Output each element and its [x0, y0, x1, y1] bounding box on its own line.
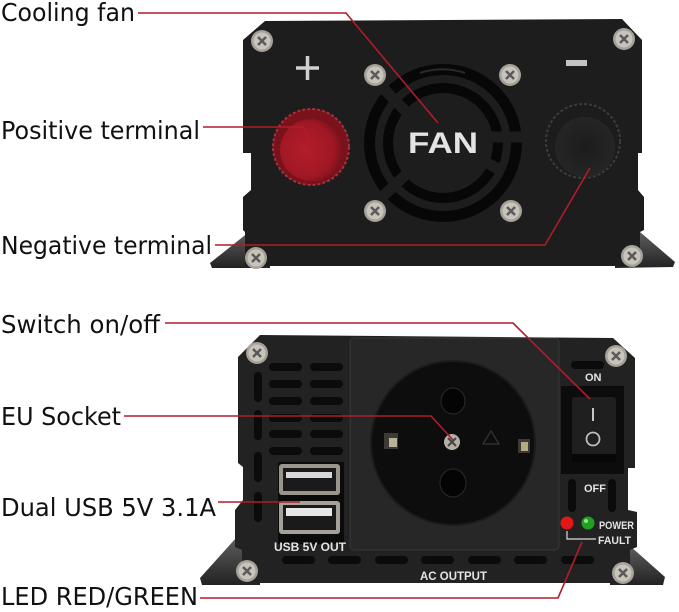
LED indicators: [560, 516, 596, 539]
USB ports: [278, 462, 344, 544]
callout: switch on/off: Switch on/off: [1, 310, 161, 339]
callout: positive terminal: Positive terminal: [1, 116, 200, 145]
panel: front view of inverter: [210, 19, 675, 269]
inverter body: [243, 19, 644, 266]
callout: switch on/off: [1, 310, 590, 399]
negative terminal knob: [546, 104, 620, 178]
callout: EU socket: EU Socket: [1, 402, 121, 431]
panel: rear view of inverter: [200, 335, 665, 585]
vent slots: [254, 361, 616, 564]
EU socket: [371, 361, 535, 525]
positive terminal knob: [273, 109, 349, 185]
screws: [236, 342, 634, 584]
callout: LED red/green: LED RED/GREEN: [1, 582, 198, 611]
fan label: FAN: [408, 127, 478, 160]
fan grille: [364, 64, 530, 222]
callout: LED red/green: [1, 542, 582, 611]
callout: positive terminal: [1, 116, 311, 145]
minus symbol: [566, 60, 587, 66]
OFF label: OFF: [584, 483, 606, 495]
inverter body: [235, 335, 637, 583]
ON label: ON: [585, 372, 602, 384]
rocker switch: [561, 386, 624, 474]
screws: [245, 28, 643, 269]
callout: cooling fan: [1, 0, 438, 123]
mounting feet: [210, 232, 675, 268]
socket panel: [350, 338, 559, 550]
fault label: FAULT: [598, 535, 631, 547]
mounting feet: [200, 538, 665, 585]
plus symbol: [296, 56, 319, 80]
AC output label: AC OUTPUT: [420, 571, 487, 583]
callout: negative terminal: [1, 168, 590, 260]
USB label: USB 5V OUT: [274, 542, 346, 554]
callout: EU socket: [1, 402, 453, 440]
power label: POWER: [599, 520, 634, 532]
callout: dual USB: Dual USB 5V 3.1A: [1, 493, 216, 522]
callout: negative terminal: Negative terminal: [1, 231, 212, 260]
